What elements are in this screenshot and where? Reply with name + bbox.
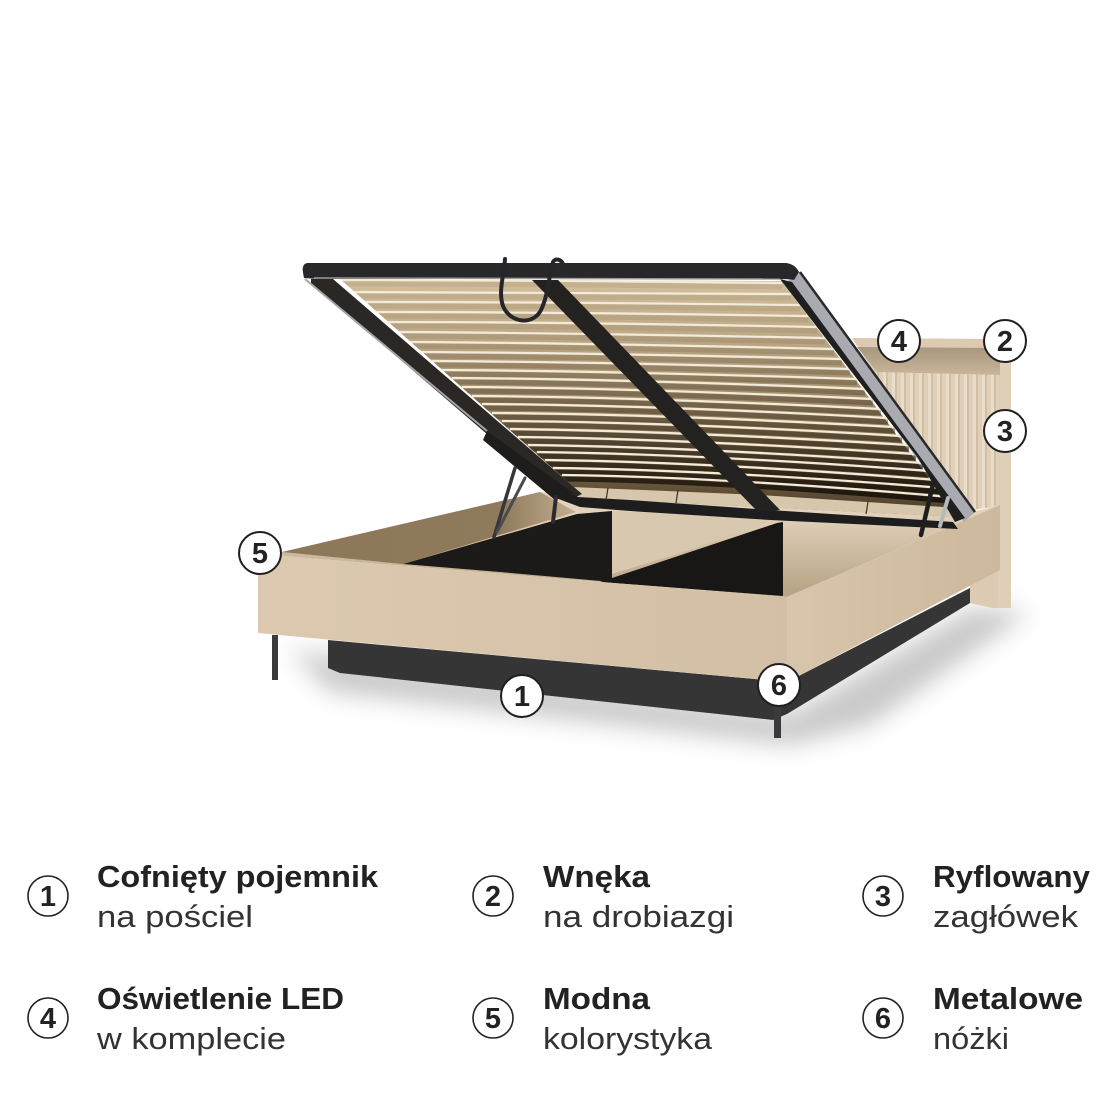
marker 6: 6 <box>771 670 787 702</box>
lower beige strip <box>572 487 958 517</box>
legend item 3: 3 <box>875 881 891 913</box>
ribbed panel <box>875 372 998 512</box>
legend item 3: zagłówek <box>933 899 1079 934</box>
leg right <box>774 705 781 738</box>
raised slatted lid <box>303 263 975 529</box>
frame left <box>311 279 582 502</box>
floor shadow <box>290 608 1030 745</box>
legend item 5: Modna <box>543 981 651 1016</box>
legend item 3: Ryflowany <box>933 859 1091 894</box>
headboard <box>852 338 1011 608</box>
LED niche <box>857 347 1000 375</box>
bed illustration <box>258 259 1030 745</box>
marker 5: 5 <box>252 538 268 570</box>
handle strap <box>501 259 563 321</box>
frame top <box>303 263 799 280</box>
legend item 1: Cofnięty pojemnik <box>97 859 379 894</box>
marker 5 <box>239 532 281 574</box>
storage box interior <box>282 492 1000 597</box>
marker 4 <box>878 320 920 362</box>
legend item 2: 2 <box>485 881 501 913</box>
legend item 3 <box>863 859 1091 934</box>
marker 1 <box>501 675 543 717</box>
legend item 2 <box>473 859 734 934</box>
legend item 6 <box>863 981 1083 1056</box>
silver side rail right <box>788 272 975 522</box>
legend item 4: 4 <box>40 1003 56 1035</box>
legend item 6: Metalowe <box>933 981 1083 1016</box>
legend item 5: 5 <box>485 1003 501 1035</box>
legend item 1 <box>28 859 379 934</box>
frame bottom <box>556 489 958 529</box>
legend item 1: 1 <box>40 881 56 913</box>
gas strut block <box>483 431 573 500</box>
centre strut <box>532 280 780 512</box>
legend item 4: Oświetlenie LED <box>97 981 344 1016</box>
legend item 5 <box>473 981 713 1056</box>
legend item 2: Wnęka <box>543 859 651 894</box>
plinth <box>328 588 970 720</box>
gas struts <box>494 468 948 537</box>
marker 2: 2 <box>997 326 1013 358</box>
marker 4: 4 <box>891 326 907 358</box>
marker 1: 1 <box>514 681 530 713</box>
side panel <box>787 505 1000 682</box>
marker 6 <box>758 664 800 706</box>
leg left <box>272 635 278 680</box>
front panel <box>258 554 787 682</box>
frame right <box>780 279 965 522</box>
marker 3: 3 <box>997 416 1013 448</box>
legend item 1: na pościel <box>97 899 253 934</box>
legend item 4 <box>28 981 344 1056</box>
slat clips <box>606 488 868 514</box>
marker 2 <box>984 320 1026 362</box>
legend item 5: kolorystyka <box>543 1021 713 1056</box>
marker 3 <box>984 410 1026 452</box>
legend item 6: nóżki <box>933 1021 1009 1056</box>
legend item 6: 6 <box>875 1003 891 1035</box>
legend item 2: na drobiazgi <box>543 899 734 934</box>
legend item 4: w komplecie <box>96 1021 286 1056</box>
